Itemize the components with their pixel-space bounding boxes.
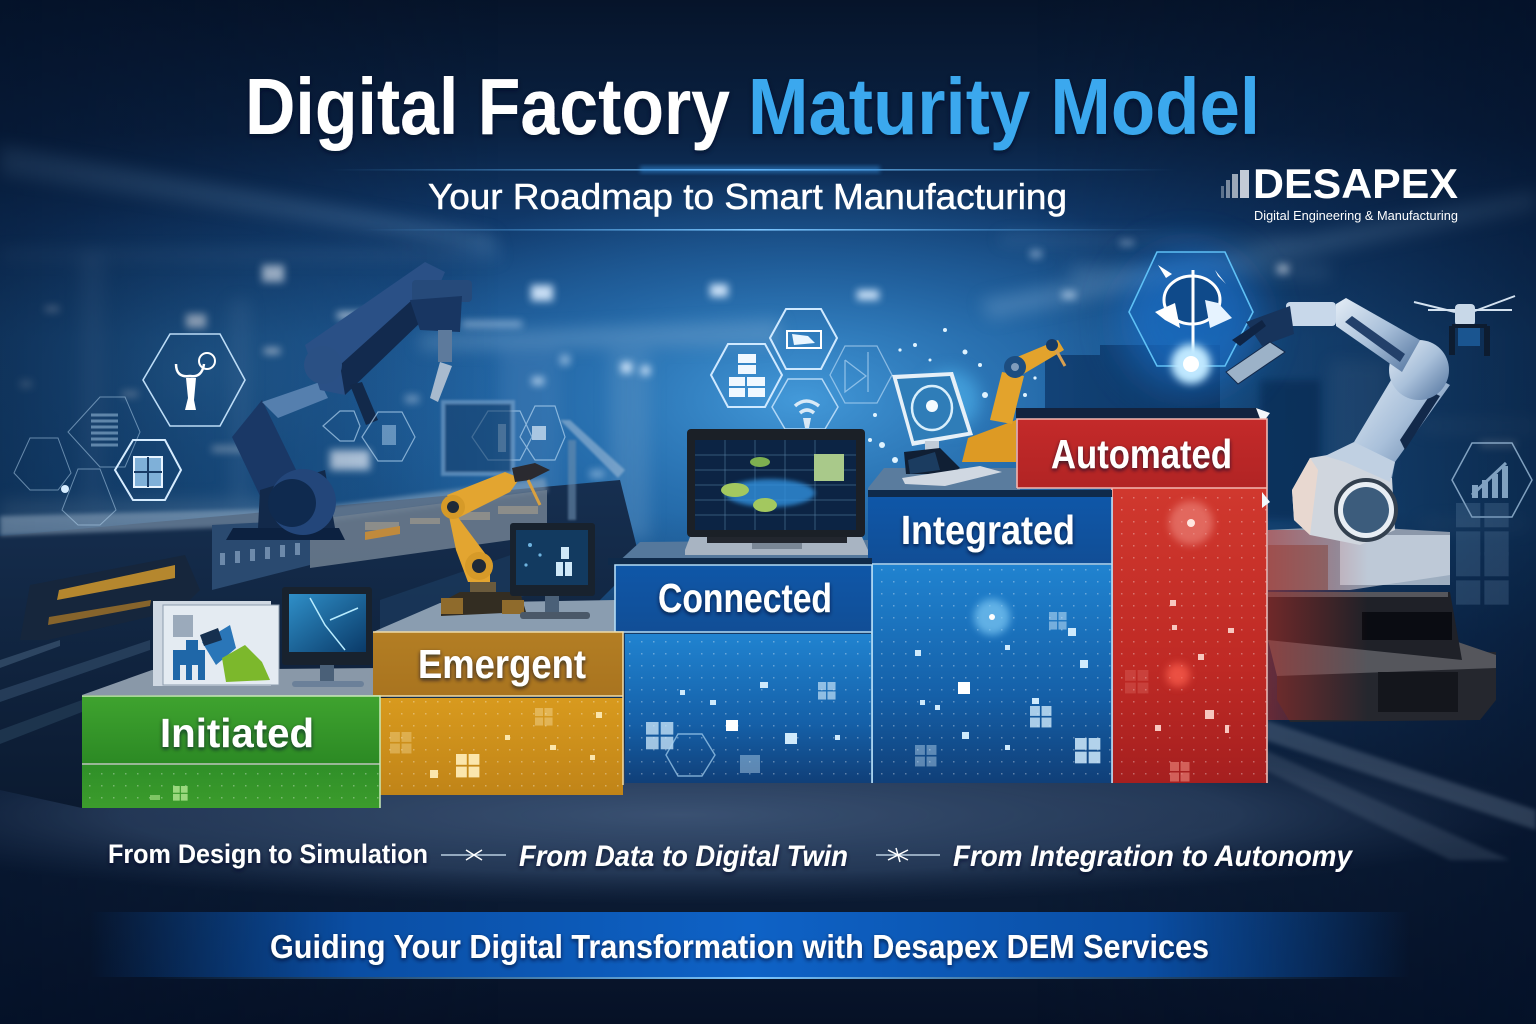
data squares <box>646 682 840 773</box>
icon: monitor on initiated step <box>282 587 372 687</box>
subtitle with rules <box>330 166 1175 231</box>
label: Emergent <box>418 641 586 687</box>
faded squares right <box>1456 503 1509 605</box>
logo: DESAPEX <box>1221 160 1458 223</box>
hexagon icon: list <box>68 397 140 467</box>
hexagon icon: pen <box>14 438 116 525</box>
text: from data to digital twin: From Data to Digital Twin <box>519 840 848 873</box>
dark skyline behind automated step <box>1045 345 1320 520</box>
step surface: connected <box>615 540 870 565</box>
footer banner: Guiding Your Digital Transformation with Desapex DEM Services <box>270 928 1209 965</box>
panel: Automated <box>1017 419 1270 783</box>
panel: Emergent <box>373 632 623 795</box>
step surface: emergent <box>373 600 623 632</box>
hexagon icon: diagram <box>830 346 892 403</box>
arrow: second connector <box>876 848 940 862</box>
icon: CAD sheet <box>153 601 279 686</box>
icon: yellow robot on integrated step <box>962 339 1065 462</box>
data squares <box>1125 600 1234 782</box>
data squares <box>150 786 188 801</box>
icon: laptop with world map <box>685 429 868 555</box>
icon: drone <box>1414 296 1515 356</box>
arrow: first connector <box>441 850 506 860</box>
step: automated top ledge <box>1016 408 1270 424</box>
title <box>245 62 1260 151</box>
text: from integration to autonomy: From Integration to Autonomy <box>953 840 1353 873</box>
logo: DESAPEX: Digital Engineering & Manufacturing <box>1254 208 1458 223</box>
icon: glowing hexagon top right <box>1120 250 1260 390</box>
data squares <box>390 708 602 778</box>
icon: tablet with gauge <box>892 372 1002 486</box>
title: Digital Factory <box>245 62 730 151</box>
panel: Connected <box>608 558 872 783</box>
data squares <box>915 612 1100 766</box>
hexagon cluster: centre <box>711 309 892 429</box>
step surface: initiated <box>82 668 380 696</box>
icon: hexagon chart right <box>1452 443 1532 517</box>
hexagon icons: centre left <box>323 406 565 461</box>
text: from design to simulation: From Design to Simulation <box>108 839 428 869</box>
footer banner <box>90 912 1410 979</box>
label: Connected <box>658 575 832 621</box>
logo: DESAPEX: DESAPEX <box>1253 160 1458 207</box>
conveyor machinery at left <box>0 478 640 808</box>
panel: Integrated <box>868 490 1112 783</box>
light flares <box>1166 501 1213 687</box>
title: Maturity Model <box>748 62 1260 151</box>
background monitor with crane <box>443 402 625 520</box>
icon: monitor on emergent step <box>510 523 595 619</box>
icon: white robot arm right <box>1226 298 1496 722</box>
panel: Initiated <box>82 696 380 808</box>
icon: yellow robot on emergent step <box>441 463 550 616</box>
sparkles around tablet <box>868 328 1037 463</box>
label: Initiated <box>160 710 314 756</box>
robot pedestal <box>1268 526 1496 722</box>
icon: logo grid <box>1221 170 1249 198</box>
icons: hexagons left <box>14 334 565 525</box>
icon: blue robot arm left <box>226 262 472 540</box>
label: Automated <box>1051 431 1232 477</box>
step surface: integrated <box>868 468 1020 490</box>
hexagon icon: blocks <box>711 344 782 407</box>
subtitle with rules: Your Roadmap to Smart Manufacturing <box>428 176 1067 217</box>
light flare <box>974 599 1010 635</box>
hexagon icon: image <box>770 309 837 369</box>
hexagon icon: wifi <box>772 379 838 429</box>
hexagon icon: lab stand <box>143 334 245 426</box>
label: Integrated <box>901 507 1075 553</box>
hexagon icon: layout <box>115 440 181 500</box>
